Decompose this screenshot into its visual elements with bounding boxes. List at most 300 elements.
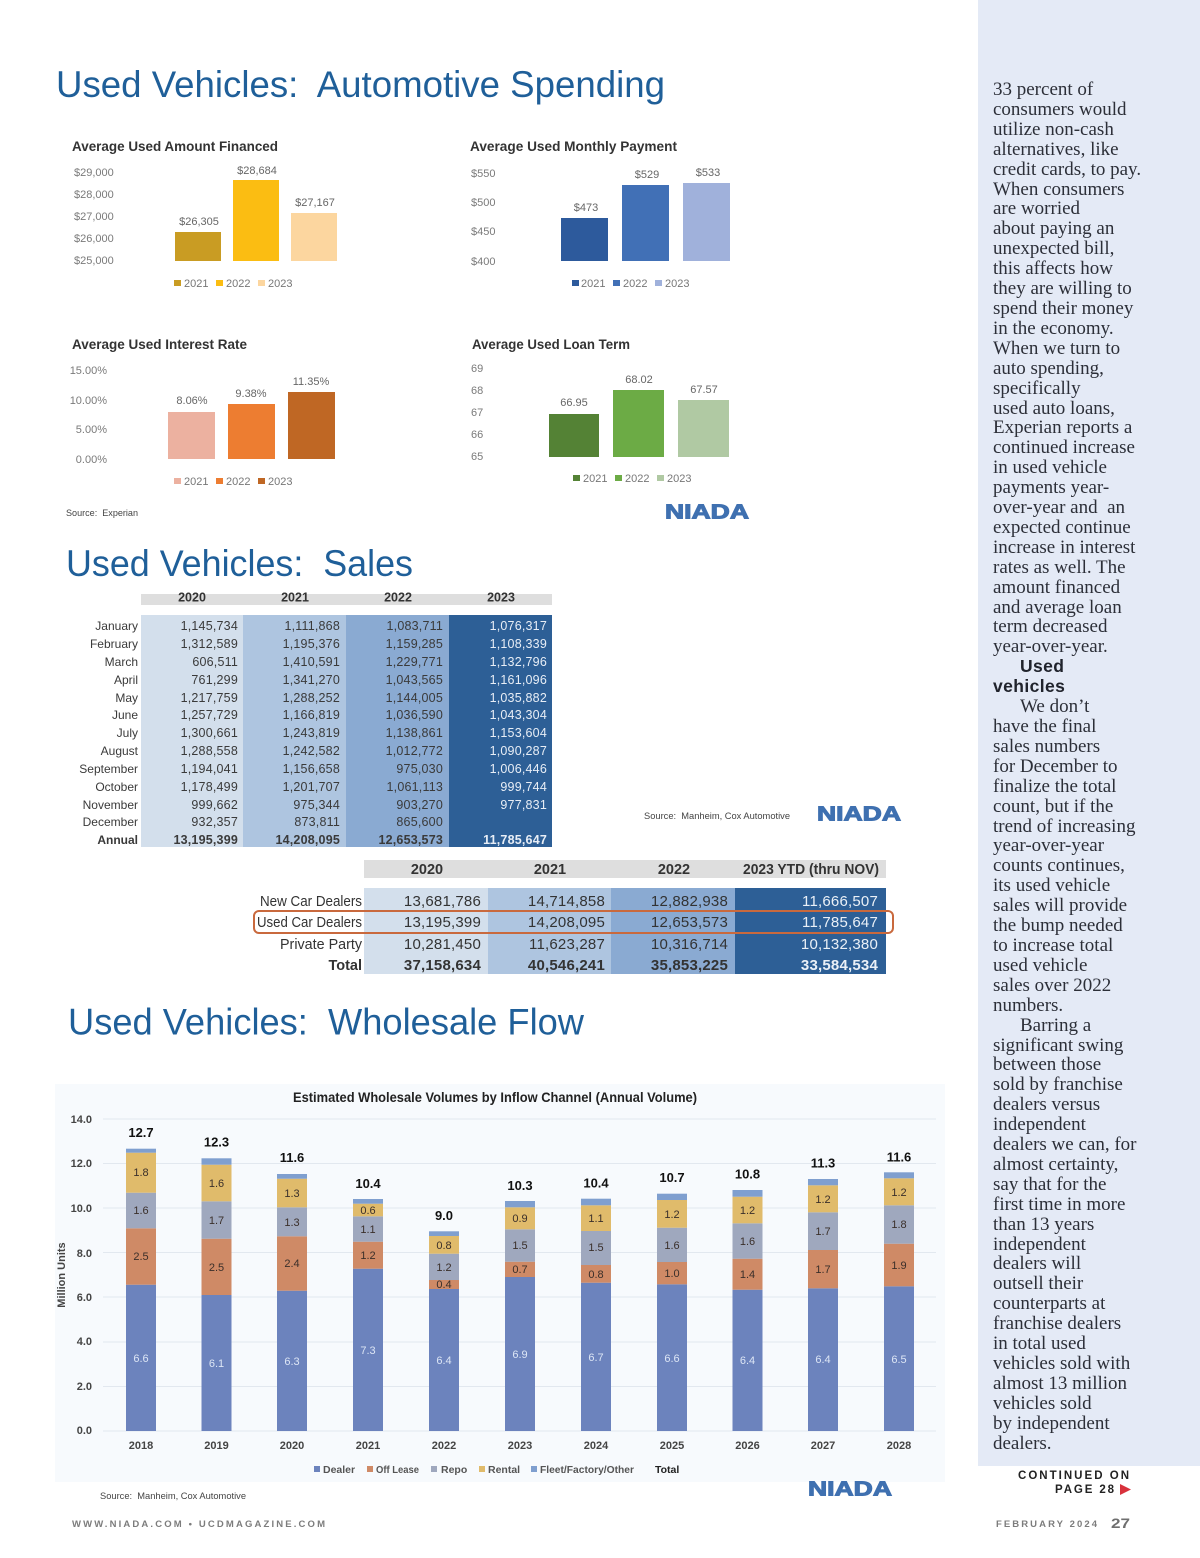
article body text: the bump needed: [993, 915, 1123, 936]
bar: 2020: 11.6: [280, 1150, 304, 1165]
chart: average used amount financed: 2023: [268, 278, 292, 290]
bar: 2018: 2018: [129, 1440, 153, 1452]
table: monthly used vehicle sales: 1,090,287: [490, 744, 547, 758]
article body text: expected continue: [993, 517, 1131, 538]
article body text: used vehicle: [993, 955, 1087, 976]
chart: average used loan term: 66: [471, 429, 483, 441]
bar: 2023: 2023: [508, 1440, 532, 1452]
article body text: have the final: [993, 716, 1096, 737]
sidebar panel: article text: [978, 0, 1200, 1466]
chart: estimated wholesale volumes by inflow channel: 2.0: [77, 1381, 92, 1393]
table: monthly used vehicle sales: 1,312,589: [181, 637, 238, 651]
article body text: When consumers: [993, 179, 1124, 200]
bar: 2021: 2021: [356, 1440, 380, 1452]
table: annual sales by seller type: 40,546,241: [528, 957, 605, 974]
bar: 2019: 6.1: [209, 1358, 224, 1370]
bar: 2028: [884, 1150, 914, 1452]
bar: 2023: [505, 1178, 535, 1452]
bar: 2024: 1.1: [588, 1213, 604, 1225]
table: monthly used vehicle sales: 1,144,005: [386, 691, 443, 705]
table: monthly used vehicle sales: June: [112, 708, 138, 722]
table: monthly used vehicle sales: 14,208,095: [275, 833, 340, 847]
chart: average used amount financed: $28,000: [74, 189, 114, 201]
chart: average used loan term: 68.02: [625, 374, 653, 386]
bar: 2020: 2020: [280, 1440, 304, 1452]
chart: average used amount financed: $28,684: [237, 165, 277, 177]
bar: 2025: 10.7: [659, 1170, 685, 1185]
article body text: credit cards, to pay.: [993, 159, 1141, 180]
chart: average used loan term: 68: [471, 385, 483, 397]
bar: 2019: 2.5: [209, 1262, 224, 1274]
article body text: specifically: [993, 378, 1081, 399]
chart: average used amount financed: $27,000: [74, 211, 114, 223]
chart: estimated wholesale volumes by inflow channel: 8.0: [77, 1248, 92, 1260]
table: monthly used vehicle sales: August: [101, 744, 139, 758]
table: annual sales by seller type: 10,132,380: [801, 936, 878, 953]
article body text: for December to: [993, 756, 1118, 777]
bar: 2022: 1.2: [436, 1262, 452, 1274]
table: monthly used vehicle sales: 1,166,819: [283, 708, 340, 722]
bar: 2018: 1.6: [133, 1205, 149, 1217]
chart: average used amount financed: $27,167: [295, 197, 335, 209]
article body text: significant swing: [993, 1034, 1123, 1056]
table: monthly used vehicle sales: 903,270: [396, 798, 443, 812]
legend: inflow channels: Fleet/Factory/Other: [540, 1464, 634, 1476]
bar: 2023: 0.9: [512, 1213, 528, 1225]
article body text: year-over-year: [993, 835, 1104, 856]
bar: 2028: 1.9: [891, 1260, 907, 1272]
bar: 2022: 2022: [432, 1440, 456, 1452]
table: monthly used vehicle sales: 1,012,772: [386, 744, 443, 758]
table: monthly used vehicle sales: 1,153,604: [490, 726, 547, 740]
bar: 2027: 11.3: [811, 1156, 835, 1170]
table: monthly used vehicle sales: April: [114, 673, 138, 687]
article body text: sales will provide: [993, 895, 1127, 916]
bar: 2024: 1.5: [588, 1242, 604, 1254]
chart: average used monthly payment: Average Used Monthly Payment: [470, 139, 678, 154]
bar: 2027: 2027: [811, 1440, 835, 1452]
table: annual sales by seller type: 10,316,714: [651, 936, 728, 953]
continued on page 28: CONTINUED ON: [1018, 1470, 1129, 1482]
table: annual sales by seller type: 12,882,938: [651, 893, 728, 910]
bar: 2025: 2025: [660, 1440, 684, 1452]
article body text: and average loan: [993, 597, 1122, 618]
bar: 2028: 2028: [887, 1440, 911, 1452]
bar: 2021: 0.6: [360, 1205, 376, 1217]
chart: average used monthly payment: $550: [471, 168, 495, 180]
footer: date: FEBRUARY 2024: [996, 1519, 1098, 1530]
chart: average used loan term: 2023: [667, 473, 691, 485]
table: monthly used vehicle sales: 1,036,590: [386, 708, 443, 722]
article body text: its used vehicle: [993, 875, 1110, 896]
article body text: dealers versus: [993, 1094, 1100, 1115]
continued on page 28: PAGE 28: [1055, 1484, 1115, 1496]
table: monthly used vehicle sales: September: [79, 762, 138, 776]
article body text: When we turn to: [993, 338, 1120, 359]
table: monthly used vehicle sales: 1,035,882: [490, 691, 547, 705]
chart: average used interest rate: 11.35%: [293, 376, 329, 388]
chart: average used monthly payment: $533: [696, 167, 720, 179]
article body text: finalize the total: [993, 776, 1116, 797]
table: monthly used vehicle sales: 1,288,558: [181, 744, 238, 758]
chart: estimated wholesale volumes by inflow channel: 14.0: [71, 1114, 92, 1126]
table: annual sales by seller type: Private Party: [280, 937, 363, 953]
table: annual sales by seller type: 12,653,573: [651, 914, 728, 931]
bar: 2025: 1.0: [664, 1268, 680, 1280]
table: annual sales by seller type: 2022: [658, 862, 690, 878]
bar: 2022: 9.0: [435, 1208, 453, 1223]
chart: average used loan term: [471, 337, 729, 485]
table: monthly used vehicle sales: July: [117, 726, 138, 740]
bar: 2026: 1.2: [740, 1205, 755, 1217]
table: monthly used vehicle sales: 11,785,647: [483, 833, 547, 847]
legend: inflow channels: Off Lease: [376, 1464, 419, 1476]
table: monthly used vehicle sales: 1,083,711: [387, 619, 443, 633]
table: annual sales by seller type: 35,853,225: [651, 957, 728, 974]
table: annual sales by seller type: 33,584,534: [801, 957, 878, 974]
table: monthly used vehicle sales: February: [90, 637, 138, 651]
article body text: numbers.: [993, 995, 1063, 1016]
article body text: 33 percent of: [993, 79, 1093, 100]
article body text: by independent: [993, 1413, 1110, 1434]
bar: 2024: 0.8: [588, 1269, 604, 1281]
bar: 2025: 1.2: [664, 1209, 680, 1221]
article body text: dealers we can, for: [993, 1134, 1136, 1155]
bar: 2026: 1.4: [740, 1269, 755, 1281]
chart: average used monthly payment: 2023: [665, 278, 689, 290]
chart: average used monthly payment: 2022: [623, 278, 647, 290]
table: annual sales by seller type: 2023 YTD (thru NOV): [743, 862, 879, 878]
article body text: We don’t: [1020, 696, 1089, 717]
logo: NIADA top: NIADA: [665, 502, 749, 524]
table: monthly used vehicle sales: 1,178,499: [181, 780, 238, 794]
legend: inflow channels: Rental: [488, 1464, 520, 1476]
bar: 2022: 6.4: [436, 1355, 452, 1367]
table: monthly used vehicle sales: 865,600: [396, 815, 443, 829]
article body text: almost 13 million: [993, 1373, 1127, 1394]
bar: 2018: 6.6: [133, 1353, 149, 1365]
table: annual sales by seller type: 10,281,450: [404, 936, 481, 953]
article body text: used auto loans,: [993, 398, 1115, 418]
bar: 2028: 1.2: [891, 1187, 907, 1199]
footer: page number: 27: [1111, 1515, 1130, 1531]
table: monthly used vehicle sales: 1,194,041: [181, 762, 238, 776]
chart: estimated wholesale volumes by inflow channel: 6.0: [77, 1292, 92, 1304]
article body text: increase in interest: [993, 537, 1135, 558]
article body text: they are willing to: [993, 278, 1132, 299]
table: annual sales by seller type: New Car Dealers: [260, 894, 362, 910]
table: monthly used vehicle sales: 1,242,582: [283, 744, 340, 758]
table: annual sales by seller type: 37,158,634: [404, 957, 481, 974]
article body text: outsell their: [993, 1273, 1083, 1294]
table: monthly used vehicle sales: 975,030: [396, 762, 443, 776]
table: monthly used vehicle sales: 977,831: [500, 798, 547, 812]
table: monthly used vehicle sales: 1,195,376: [283, 637, 340, 651]
chart: average used interest rate: [70, 337, 335, 488]
continued on page 28: [1018, 1470, 1131, 1496]
logo: NIADA middle: NIADA: [817, 804, 901, 826]
bar: 2024: 10.4: [583, 1176, 609, 1190]
bar: 2020: 6.3: [284, 1356, 300, 1368]
article body text: term decreased: [993, 616, 1107, 637]
table: monthly used vehicle sales: January: [95, 619, 138, 633]
chart: average used interest rate: 9.38%: [235, 388, 267, 400]
chart: average used monthly payment: 2021: [581, 278, 605, 290]
bar: 2021: 1.2: [360, 1250, 376, 1262]
table: monthly used vehicle sales: 1,300,661: [181, 726, 238, 740]
article body text: continued increase: [993, 437, 1135, 458]
bar: 2022: 0.4: [436, 1279, 452, 1291]
chart: average used interest rate: 15.00%: [70, 365, 107, 377]
chart: average used amount financed: Average Used Amount Financed: [72, 139, 278, 154]
table: annual sales by seller type: 11,785,647: [802, 914, 878, 931]
table: monthly used vehicle sales: 606,511: [192, 655, 238, 669]
table: monthly used vehicle sales: 932,357: [191, 815, 238, 829]
table: monthly used vehicle sales: 13,195,399: [173, 833, 238, 847]
table: monthly used vehicle sales: November: [83, 798, 138, 812]
article body text: in total used: [993, 1333, 1086, 1354]
table: annual sales by seller type: 2021: [534, 862, 566, 878]
article body text: amount financed: [993, 577, 1120, 598]
chart: average used amount financed: $29,000: [74, 167, 114, 179]
table: monthly used vehicle sales: 2021: [281, 590, 309, 604]
chart: average used loan term: 66.95: [560, 397, 588, 409]
bar: 2021: [353, 1176, 383, 1452]
chart: average used amount financed: [72, 139, 337, 290]
bar: 2023: 1.5: [512, 1240, 528, 1252]
article body text: vehicles sold with: [993, 1353, 1130, 1374]
chart: average used loan term: 2022: [625, 473, 649, 485]
bar: 2028: 6.5: [891, 1354, 907, 1366]
table: monthly used vehicle sales: 1,257,729: [181, 708, 238, 722]
chart: average used interest rate: 2021: [184, 476, 208, 488]
table: annual sales by seller type: 14,208,095: [528, 914, 605, 931]
source: Manheim, Cox Automotive (sales): Source: Manheim, Cox Automotive: [644, 811, 790, 822]
table: monthly used vehicle sales: 1,076,317: [490, 619, 547, 633]
article body text: independent: [993, 1234, 1086, 1255]
bar: 2019: 1.7: [209, 1215, 224, 1227]
article body text: than 13 years: [993, 1214, 1094, 1235]
table: monthly used vehicle sales: [79, 590, 552, 847]
article body text: this affects how: [993, 258, 1113, 279]
table: monthly used vehicle sales: 1,217,759: [181, 691, 238, 705]
footer: websites: WWW.NIADA.COM • UCDMAGAZINE.COM: [72, 1519, 325, 1530]
table: annual sales by seller type: 11,666,507: [802, 893, 878, 910]
chart: estimated wholesale volumes by inflow channel: 4.0: [77, 1336, 92, 1348]
bar: 2025: [657, 1170, 687, 1452]
table: monthly used vehicle sales: 999,662: [191, 798, 238, 812]
article body text: are worried: [993, 198, 1080, 219]
table: annual sales by seller type: 13,681,786: [404, 893, 481, 910]
bar: 2018: 12.7: [128, 1125, 154, 1140]
article body text: counterparts at: [993, 1293, 1105, 1314]
chart: average used loan term: 2021: [583, 473, 607, 485]
table: monthly used vehicle sales: 999,744: [500, 780, 547, 794]
bar: 2026: [732, 1166, 762, 1452]
bar: 2026: 1.6: [740, 1236, 755, 1248]
table: annual sales by seller type: Total: [328, 958, 362, 974]
article body text: between those: [993, 1054, 1101, 1075]
table: annual sales by seller type: [254, 860, 893, 974]
chart: estimated wholesale volumes by inflow channel: Estimated Wholesale Volumes by Inflow Channel (Annual Volume): [293, 1090, 697, 1105]
bar: 2019: [202, 1134, 232, 1452]
table: monthly used vehicle sales: 975,344: [293, 798, 340, 812]
table: monthly used vehicle sales: 1,159,285: [386, 637, 443, 651]
bar: 2025: 1.6: [664, 1240, 680, 1252]
article body text: independent: [993, 1114, 1086, 1135]
table: monthly used vehicle sales: 1,138,861: [386, 726, 443, 740]
article body text: trend of increasing: [993, 816, 1135, 837]
chart: average used monthly payment: $450: [471, 226, 495, 238]
bar: 2020: 1.3: [284, 1217, 300, 1229]
chart: average used loan term: 67: [471, 407, 483, 419]
article body text: sold by franchise: [993, 1074, 1123, 1095]
chart: average used interest rate: 8.06%: [176, 395, 208, 407]
table: monthly used vehicle sales: 1,145,734: [181, 619, 238, 633]
bar: 2023: 10.3: [507, 1178, 533, 1193]
bar: 2019: 1.6: [209, 1178, 224, 1190]
article body text: alternatives, like: [993, 139, 1119, 160]
chart: average used amount financed: 2021: [184, 278, 208, 290]
table: monthly used vehicle sales: 1,043,565: [386, 673, 443, 687]
chart: estimated wholesale volumes by inflow channel: 0.0: [77, 1425, 92, 1437]
article body text: unexpected bill,: [993, 238, 1114, 259]
table: monthly used vehicle sales: 2020: [178, 590, 206, 604]
bar: 2020: 2.4: [284, 1258, 300, 1270]
article body text: about paying an: [993, 218, 1114, 239]
bar: 2023: 6.9: [512, 1349, 528, 1361]
table: monthly used vehicle sales: 1,006,446: [490, 762, 547, 776]
article body text: in used vehicle: [993, 457, 1107, 478]
bar: 2027: 6.4: [815, 1354, 831, 1366]
source: Manheim, Cox Automotive (wholesale): Source: Manheim, Cox Automotive: [100, 1491, 246, 1502]
table: monthly used vehicle sales: 1,111,868: [284, 619, 340, 633]
bar: 2028: 11.6: [887, 1150, 911, 1164]
bar: 2027: 1.2: [815, 1194, 831, 1206]
callout: used car dealers highlight: [254, 911, 893, 933]
chart: average used monthly payment: $400: [471, 256, 495, 268]
table: monthly used vehicle sales: October: [95, 780, 138, 794]
article body text: first time in more: [993, 1194, 1125, 1215]
bar: 2027: [808, 1156, 838, 1452]
table: monthly used vehicle sales: 2022: [384, 590, 412, 604]
legend: inflow channels: Total: [655, 1464, 679, 1476]
chart: average used monthly payment: [470, 139, 730, 290]
article body text: Experian reports a: [993, 417, 1132, 438]
bar: 2021: 1.1: [360, 1224, 376, 1236]
table: annual sales by seller type: 14,714,858: [528, 893, 605, 910]
chart: average used interest rate: 2023: [268, 476, 292, 488]
bar: 2018: 1.8: [133, 1167, 149, 1179]
table: monthly used vehicle sales: 1,288,252: [283, 691, 340, 705]
bar: 2019: 12.3: [204, 1134, 229, 1150]
legend: inflow channels: [314, 1464, 679, 1476]
bar: 2027: 1.7: [815, 1226, 831, 1238]
heading: wholesale flow: Used Vehicles: Wholesale Flow: [68, 1002, 584, 1042]
chart: average used interest rate: 10.00%: [70, 395, 107, 407]
article body text: franchise dealers: [993, 1313, 1121, 1334]
bar: 2024: 6.7: [588, 1352, 604, 1364]
bar: 2021: 10.4: [355, 1176, 381, 1191]
chart: average used loan term: 69: [471, 363, 483, 375]
table: monthly used vehicle sales: March: [105, 655, 138, 669]
chart: average used amount financed: $26,000: [74, 233, 114, 245]
article body text: count, but if the: [993, 796, 1113, 817]
heading: sales: Used Vehicles: Sales: [66, 543, 413, 584]
table: monthly used vehicle sales: 1,243,819: [283, 726, 340, 740]
chart: average used monthly payment: $473: [574, 202, 598, 214]
heading: automotive spending: Used Vehicles: Automotive Spending: [56, 64, 665, 105]
article body text: sales numbers: [993, 736, 1100, 757]
table: monthly used vehicle sales: 1,043,304: [490, 708, 547, 722]
table: monthly used vehicle sales: 761,299: [191, 673, 238, 687]
article body text: sales over 2022: [993, 975, 1111, 996]
table: annual sales by seller type: 13,195,399: [404, 914, 481, 931]
bar: 2020: [277, 1150, 307, 1452]
bar: 2022: 0.8: [436, 1240, 452, 1252]
article body text: almost certainty,: [993, 1154, 1118, 1175]
bar: 2024: 2024: [584, 1440, 609, 1452]
bar: 2026: 10.8: [735, 1166, 760, 1182]
article body text: vehicles sold: [993, 1393, 1092, 1414]
table: monthly used vehicle sales: December: [83, 815, 138, 829]
table: monthly used vehicle sales: 873,811: [294, 815, 340, 829]
article body text: Used: [1020, 656, 1064, 676]
chart: average used amount financed: $26,305: [179, 216, 219, 228]
chart: average used amount financed: 2022: [226, 278, 250, 290]
article body text: say that for the: [993, 1174, 1106, 1195]
chart: average used interest rate: 5.00%: [76, 424, 107, 436]
chart: estimated wholesale volumes by inflow channel: 12.0: [71, 1158, 92, 1170]
article body text: [993, 79, 1141, 1454]
chart: estimated wholesale volumes by inflow channel: [55, 1084, 945, 1482]
table: monthly used vehicle sales: 1,132,796: [490, 655, 547, 669]
table: monthly used vehicle sales: 1,061,113: [387, 780, 443, 794]
article body text: Barring a: [1020, 1015, 1091, 1036]
table: annual sales by seller type: 11,623,287: [529, 936, 605, 953]
table: monthly used vehicle sales: Annual: [97, 833, 138, 847]
chart: average used loan term: Average Used Loan Term: [472, 337, 630, 352]
bar: 2018: [126, 1125, 156, 1452]
table: monthly used vehicle sales: 1,108,339: [490, 637, 547, 651]
table: monthly used vehicle sales: 2023: [487, 590, 515, 604]
bar: 2026: 2026: [735, 1440, 760, 1452]
table: monthly used vehicle sales: 1,341,270: [283, 673, 340, 687]
chart: average used amount financed: $25,000: [74, 255, 114, 267]
table: annual sales by seller type: 2020: [411, 862, 443, 878]
bar: 2023: 0.7: [512, 1264, 528, 1276]
article body text: payments year-: [993, 477, 1109, 498]
table: monthly used vehicle sales: 1,156,658: [283, 762, 340, 776]
bar: 2019: 2019: [204, 1440, 229, 1452]
table: monthly used vehicle sales: 1,229,771: [386, 655, 443, 669]
source: Experian: Source: Experian: [66, 508, 138, 519]
icon: red arrow: [1120, 1484, 1131, 1495]
article body text: over-year and an: [993, 497, 1125, 518]
article body text: to increase total: [993, 935, 1113, 956]
chart: average used interest rate: 2022: [226, 476, 250, 488]
article body text: spend their money: [993, 298, 1133, 319]
chart: average used loan term: 67.57: [690, 384, 718, 396]
article body text: vehicles: [993, 676, 1065, 696]
article body text: year-over-year.: [993, 636, 1108, 657]
chart: estimated wholesale volumes by inflow channel: 10.0: [71, 1203, 92, 1215]
table: monthly used vehicle sales: 1,161,096: [490, 673, 547, 687]
legend: inflow channels: Repo: [441, 1464, 467, 1476]
bar: 2022: [429, 1208, 459, 1452]
article body text: consumers would: [993, 99, 1127, 120]
article body text: in the economy.: [993, 318, 1114, 339]
